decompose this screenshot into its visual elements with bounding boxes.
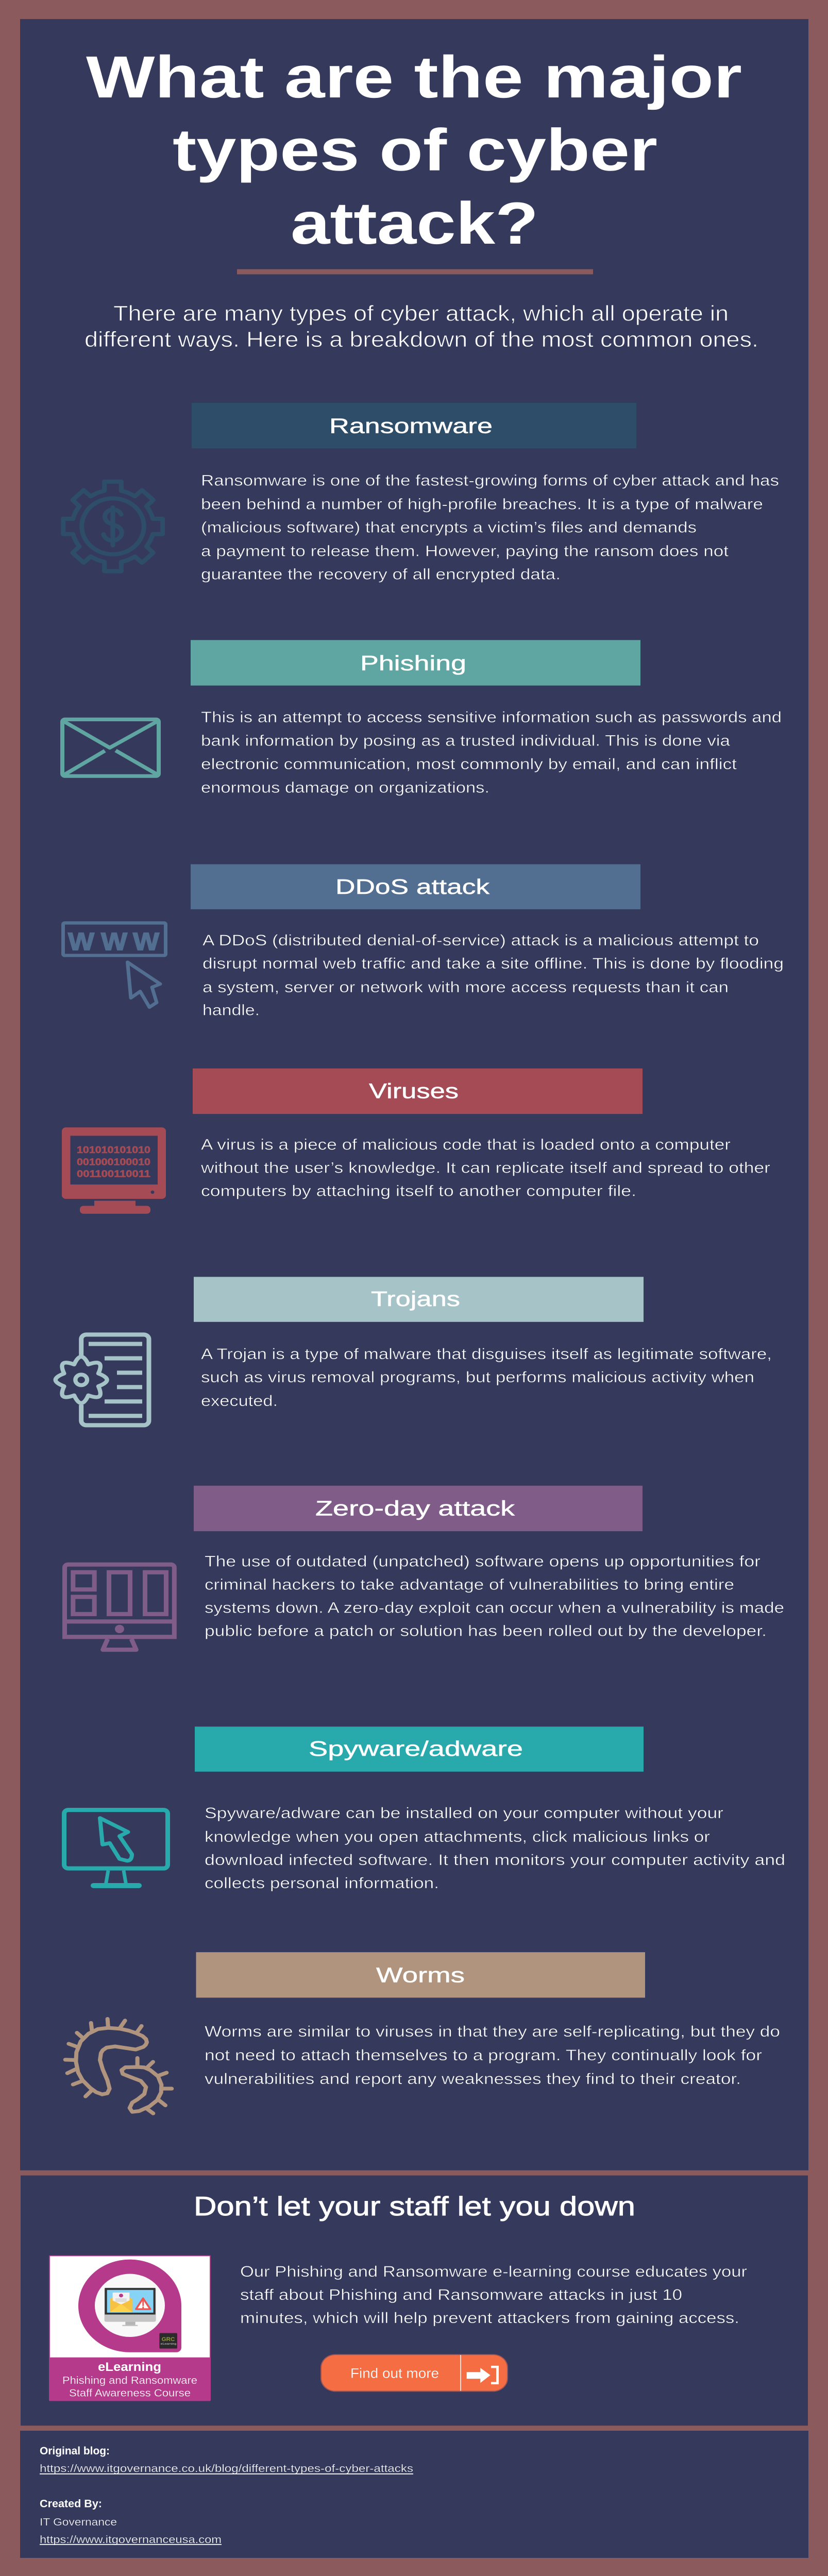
panel: Phishing [62, 640, 782, 796]
text: Worms description: Worms are similar to viruses in that they are self-replicating, but they do [205, 2023, 780, 2040]
heading: DDoS attack: DDoS attack [335, 875, 490, 899]
text: Phishing description [201, 708, 782, 796]
text: Worms description [205, 2023, 780, 2088]
text: original blog source [40, 2444, 413, 2475]
heading: Ransomware [192, 403, 636, 448]
intro text [85, 302, 758, 351]
panel: Worms [65, 1952, 780, 2113]
text: Zero-day description: systems down. A zero-day exploit can occur when a vulnerability is made [205, 1599, 784, 1616]
text: course description: Our Phishing and Ransomware e-learning course educates your [240, 2263, 747, 2280]
text: Spyware description: knowledge when you open attachments, click malicious links or [205, 1828, 710, 1845]
title [86, 44, 742, 257]
panel: DDoS attack [63, 864, 784, 1019]
text: created by [40, 2497, 222, 2546]
text: Spyware description: download infected software. It then monitors your computer activity and [205, 1851, 785, 1868]
text: DDoS description: A DDoS (distributed denial-of-service) attack is a malicious attempt to [202, 932, 759, 949]
heading: Zero-day attack: Zero-day attack [315, 1497, 515, 1520]
text: Trojans description: executed. [201, 1392, 278, 1409]
heading: Worms [196, 1952, 645, 1997]
panel: sources footer [20, 2431, 808, 2558]
text: DDoS description: a system, server or network with more access requests than it can [202, 979, 729, 996]
panel: Spyware/adware [64, 1726, 785, 1891]
icon: monitor with binary code: 001000100010 [77, 1157, 150, 1167]
icon: document with gear [56, 1334, 149, 1425]
heading: Viruses: Viruses [369, 1080, 459, 1103]
text: Viruses description [200, 1136, 770, 1199]
image: eLearning course card: Phishing and Ransomware [62, 2374, 197, 2386]
icon: monitor with binary code: 001100110011 [77, 1170, 150, 1179]
icon: gear with dollar sign [63, 482, 163, 571]
heading: Ransomware: Ransomware [329, 415, 493, 438]
text: Trojans description [201, 1345, 772, 1409]
text: Ransomware description: been behind a number of high-profile breaches. It is a type of malware [201, 496, 763, 513]
heading: Zero-day attack [194, 1486, 643, 1531]
button: find out more [320, 2354, 508, 2392]
text: Spyware description: collects personal information. [205, 1874, 439, 1891]
text: Zero-day description: The use of outdated (unpatched) software opens up opportunities for [205, 1553, 761, 1570]
text: Worms description: not need to attach themselves to a program. They continually look for [205, 2047, 762, 2064]
icon: monitor with binary code: 101010101010 [77, 1145, 150, 1156]
heading: Spyware/adware [195, 1726, 644, 1772]
panel: Trojans [56, 1277, 772, 1425]
title: attack? [291, 190, 538, 257]
text: Zero-day description: criminal hackers to take advantage of vulnerabilities to bring entire [205, 1576, 734, 1593]
text: Trojans description: such as virus removal programs, but performs malicious activity when [201, 1368, 754, 1386]
icon: monitor with windows [64, 1565, 175, 1650]
title: types of cyber [173, 117, 657, 183]
heading: Phishing: Phishing [360, 652, 466, 675]
text: Viruses description: without the user’s knowledge. It can replicate itself and spread to other [200, 1159, 770, 1176]
icon: www address bar and cursor: WWW [68, 927, 159, 956]
text: DDoS description: disrupt normal web traffic and take a site offline. This is done by flooding [202, 955, 784, 972]
heading: call to action: Don’t let your staff let you down [194, 2191, 635, 2221]
image: eLearning course card: Staff Awareness Course [69, 2386, 191, 2399]
text: Trojans description: A Trojan is a type of malware that disguises itself as legitimate software, [201, 1345, 772, 1362]
icon: monitor with binary code [62, 1127, 166, 1214]
text: Zero-day description: public before a patch or solution has been rolled out by the developer. [205, 1622, 767, 1639]
text: Spyware description: Spyware/adware can be installed on your computer without your [205, 1804, 723, 1821]
text: Worms description: vulnerabilities and report any weaknesses they find to their creator. [205, 2071, 741, 2088]
button: find out more: Find out more [350, 2366, 439, 2381]
text: original blog source: https://www.itgovernance.co.uk/blog/different-types-of-cyber-attacks [40, 2462, 413, 2475]
text: course description [240, 2263, 747, 2327]
panel: Zero-day attack [64, 1486, 784, 1650]
heading: Worms: Worms [376, 1964, 465, 1987]
heading: Trojans: Trojans [371, 1287, 460, 1311]
text: Zero-day description [205, 1553, 784, 1639]
text: Viruses description: computers by attaching itself to another computer file. [201, 1182, 636, 1199]
text: Ransomware description: Ransomware is one of the fastest-growing forms of cyber attack and has [201, 472, 779, 489]
text: DDoS description: handle. [202, 1002, 260, 1019]
text: course description: staff about Phishing and Ransomware attacks in just 10 [240, 2286, 682, 2303]
image: eLearning course card: GRC [162, 2337, 175, 2343]
icon: envelope [62, 719, 159, 776]
heading: Trojans [194, 1277, 644, 1322]
text: Phishing description: electronic communication, most commonly by email, and can inflict [201, 755, 737, 772]
image: eLearning course card: eLearning [161, 2343, 176, 2346]
text: original blog source: Original blog: [40, 2444, 110, 2457]
text: Ransomware description [201, 472, 779, 583]
text: course description: minutes, which will help prevent attackers from gaining access. [240, 2310, 739, 2327]
text: created by: Created By: [40, 2497, 102, 2510]
text: created by: https://www.itgovernanceusa.com [40, 2533, 222, 2546]
text: DDoS description [202, 932, 784, 1019]
text: Viruses description: A virus is a piece of malicious code that is loaded onto a computer [201, 1136, 731, 1153]
icon: monitor with cursor [64, 1810, 168, 1886]
text: Ransomware description: a payment to release them. However, paying the ransom does not [201, 543, 729, 560]
text: Ransomware description: guarantee the recovery of all encrypted data. [201, 566, 561, 583]
icon: worms [65, 2019, 172, 2113]
text: Ransomware description: (malicious software) that encrypts a victim’s files and demands [201, 519, 697, 536]
image: eLearning course card: eLearning [98, 2360, 161, 2374]
panel: call to action [21, 2176, 808, 2426]
text: created by: IT Governance [40, 2516, 117, 2528]
panel: Ransomware [63, 403, 779, 583]
heading: Spyware/adware: Spyware/adware [309, 1737, 523, 1761]
text: Phishing description: enormous damage on organizations. [201, 779, 489, 796]
icon: arrow [467, 2367, 498, 2383]
text: Phishing description: bank information by posing as a trusted individual. This is done via [201, 732, 731, 749]
intro text: There are many types of cyber attack, which all operate in [113, 302, 729, 326]
text: Phishing description: This is an attempt to access sensitive information such as passwords and [201, 708, 782, 725]
image: eLearning course card [49, 2255, 211, 2401]
text: Spyware description [205, 1804, 785, 1891]
panel: Viruses [62, 1069, 770, 1214]
heading: DDoS attack [191, 864, 640, 909]
intro text: different ways. Here is a breakdown of the most common ones. [85, 328, 758, 351]
title: What are the major [86, 44, 742, 110]
heading: Viruses [193, 1069, 643, 1114]
heading: Phishing [191, 640, 640, 686]
panel: main content background [20, 19, 808, 2171]
icon: www address bar and cursor [63, 923, 166, 1007]
